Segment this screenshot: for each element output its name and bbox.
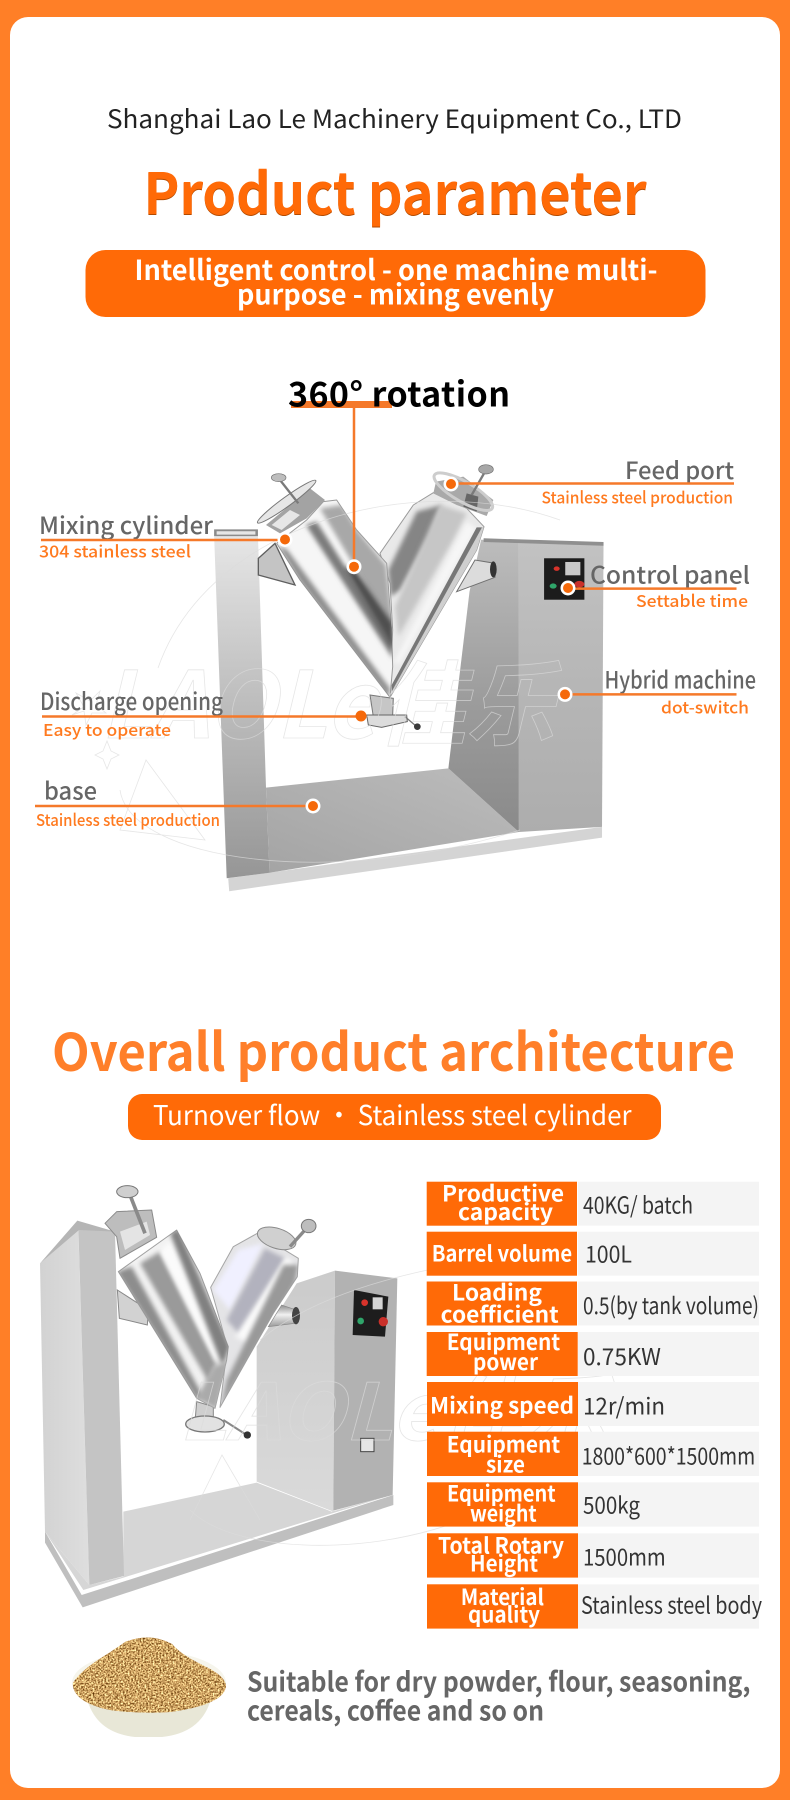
- callout: hybrid machine: [558, 662, 756, 719]
- machine frame: [214, 529, 604, 891]
- callout: discharge opening: Easy to operate: [43, 717, 171, 741]
- row: mixing speed: [427, 1382, 759, 1426]
- callout: base: base: [44, 772, 97, 806]
- row: loading coefficient: coefficient: [441, 1297, 559, 1329]
- row: mixing speed: 12r/min: [583, 1387, 665, 1421]
- right arm: [380, 493, 485, 698]
- title: overall product architecture: Overall product architecture: [52, 1011, 735, 1086]
- callout: mixing cylinder: 304 stainless steel: [39, 538, 191, 562]
- row: productive capacity: [427, 1177, 759, 1227]
- callout: hybrid machine: dot-switch: [661, 695, 749, 719]
- callout: control panel: [560, 556, 750, 612]
- watermark: upper machine: LAOLe佳乐: [100, 632, 562, 765]
- left lid: [255, 474, 325, 533]
- right lid: [255, 1219, 316, 1254]
- company name: Shanghai Lao Le Machinery Equipment Co., LTD: [107, 100, 682, 136]
- row: equipment power: Equipment: [447, 1325, 560, 1357]
- row: material quality: [427, 1580, 762, 1630]
- callout: base: [35, 772, 320, 831]
- suitable materials text: cereals, coffee and so on: [247, 1690, 544, 1729]
- subtitle pill: turnover flow: Turnover flow · Stainless steel cylinder: [153, 1094, 632, 1133]
- right lid: [429, 465, 497, 517]
- title: product parameter: Product parameter: [144, 149, 647, 231]
- row: equipment power: [427, 1325, 759, 1377]
- row: equipment power: 0.75KW: [583, 1338, 661, 1372]
- row: total rotary height: Height: [470, 1547, 538, 1579]
- icon: bowl of grain: [72, 1637, 226, 1737]
- machine illustration: lower: [40, 1186, 397, 1607]
- row: productive capacity: capacity: [458, 1195, 553, 1227]
- base plate: [45, 1483, 393, 1607]
- row: equipment weight: Equipment: [447, 1477, 556, 1509]
- callout: control panel: Settable time: [636, 588, 748, 612]
- subtitle pill: [86, 249, 706, 317]
- suitable materials text: [247, 1661, 750, 1729]
- row: total rotary height: [427, 1528, 759, 1579]
- row: mixing speed: Mixing speed: [430, 1388, 574, 1420]
- callout: discharge opening: Discharge opening: [40, 683, 223, 717]
- watermark: upper machine: [72, 501, 562, 862]
- row: equipment size: [427, 1427, 759, 1480]
- suitable materials text: Suitable for dry powder, flour, seasoning,: [247, 1661, 750, 1700]
- row: loading coefficient: [427, 1276, 759, 1329]
- left lid: [105, 1186, 157, 1258]
- row: loading coefficient: Loading: [452, 1276, 542, 1308]
- row: barrel volume: Barrel volume: [432, 1237, 572, 1269]
- watermark: lower machine: LAOLe佳乐: [178, 1351, 614, 1463]
- row: equipment weight: [427, 1477, 759, 1529]
- left arm: [117, 1228, 230, 1410]
- row: total rotary height: Total Rotary: [438, 1528, 564, 1560]
- row: barrel volume: [427, 1232, 759, 1276]
- machine illustration: upper: [214, 465, 604, 891]
- V tank: [255, 465, 497, 730]
- callout: mixing cylinder: Mixing cylinder: [39, 507, 213, 541]
- row: equipment weight: weight: [470, 1497, 537, 1529]
- row: barrel volume: 100L: [585, 1236, 632, 1270]
- row: equipment weight: 500kg: [583, 1486, 640, 1520]
- spec table: [427, 1177, 762, 1630]
- left arm: [277, 500, 393, 698]
- row: equipment size: 1800*600*1500mm: [582, 1437, 755, 1471]
- row: equipment size: Equipment: [447, 1427, 560, 1459]
- row: material quality: Stainless steel body: [581, 1586, 762, 1620]
- callout: control panel: Control panel: [590, 556, 750, 590]
- subtitle pill: purpose - mixing evenly: [237, 274, 554, 314]
- row: total rotary height: 1500mm: [583, 1539, 666, 1573]
- row: loading coefficient: 0.5(by tank volume): [583, 1287, 759, 1321]
- row: equipment size: size: [486, 1448, 525, 1480]
- right arm: [211, 1233, 298, 1408]
- callout: feed port: Feed port: [625, 452, 734, 486]
- subtitle pill: Intelligent control - one machine multi-: [134, 249, 658, 289]
- callout: mixing cylinder: [39, 507, 292, 562]
- row: material quality: Material: [461, 1580, 544, 1612]
- row: material quality: quality: [468, 1598, 540, 1630]
- callout: feed port: Stainless steel production: [542, 484, 733, 508]
- row: productive capacity: 40KG/ batch: [583, 1186, 693, 1220]
- row: productive capacity: Productive: [442, 1177, 564, 1209]
- heading: 360 rotation: 360° rotation: [288, 368, 510, 416]
- right cabinet: [257, 1271, 397, 1512]
- watermark: lower machine: [178, 1260, 614, 1545]
- row: equipment power: power: [473, 1345, 538, 1377]
- callout: base: Stainless steel production: [36, 807, 220, 831]
- control panel box: [544, 558, 584, 600]
- callout: discharge opening: [40, 683, 366, 741]
- left column: [40, 1221, 124, 1585]
- callout: 360 rotation leader: [346, 406, 362, 574]
- callout: feed port: [444, 452, 734, 508]
- callout: hybrid machine: Hybrid machine: [604, 662, 756, 696]
- V tank: [105, 1186, 316, 1439]
